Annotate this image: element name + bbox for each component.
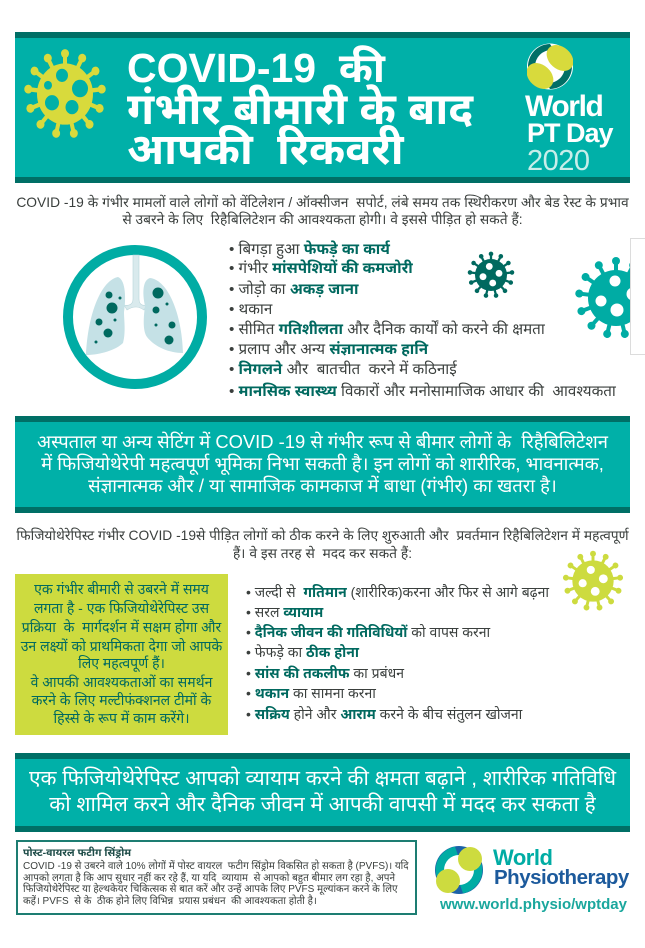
symptom list: • थकान <box>229 301 272 318</box>
post-viral fatigue box: आपको लगता है कि आप सुधार नहीं कर रहे हैं, या यदि व्यायाम से आपको बहुत बीमार लग रहा है, अपने <box>23 873 395 884</box>
help list: • फेफड़े का ठीक होना <box>246 644 359 660</box>
callout: hospital rehabilitation: संज्ञानात्मक और / या सामाजिक कामकाज में बाधा (गंभीर) का खतरा है। <box>88 475 557 496</box>
physiotherapist intro text: हैं। वे इस तरह से मदद कर सकते हैं: <box>233 546 412 561</box>
post-viral fatigue box: पोस्ट-वायरल फटीग सिंड्रोम <box>23 847 131 859</box>
post-viral fatigue box <box>16 840 417 915</box>
logo: World PT Day 2020: PT Day <box>527 118 613 148</box>
logo: World Physiotherapy: World <box>493 845 552 870</box>
logo: World PT Day 2020: World <box>525 90 602 123</box>
symptom list: • मानसिक स्वास्थ्य विकारों और मनोसामाजिक आधार की आवश्यकता <box>229 383 616 400</box>
symptom list: • प्रलाप और अन्य संज्ञानात्मक हानि <box>229 341 428 358</box>
help list <box>246 584 550 723</box>
yellow box: एक गंभीर बीमारी से उबरने में समय <box>34 581 209 597</box>
symptom list: • निगलने और बातचीत करने में कठिनाई <box>229 361 457 378</box>
help list: • थकान का सामना करना <box>246 685 376 701</box>
title: COVID-19 की <box>127 45 385 91</box>
intro text: COVID -19 के गंभीर मामलों वाले लोगों को वेंटिलेशन / ऑक्सीजन सपोर्ट, लंबे समय तक स्थिरीकरण और बेड रेस्ट के प्रभाव <box>16 195 629 210</box>
yellow box: लिए महत्वपूर्ण हैं। <box>78 655 165 671</box>
logo mark <box>527 44 573 90</box>
logo: World PT Day 2020: 2020 <box>527 145 590 177</box>
icon: yellow virus <box>24 49 106 138</box>
header panel <box>15 32 630 183</box>
callout: physiotherapist helps <box>15 753 630 832</box>
physiotherapist intro text <box>16 528 629 561</box>
icon: teal virus cropped <box>575 257 630 338</box>
title: गंभीर बीमारी के बाद <box>127 85 473 134</box>
callout: hospital rehabilitation: अस्पताल या अन्य सेटिंग में COVID -19 से गंभीर रूप से बीमार लोगों के रिहैबिलिटेशन <box>37 431 608 452</box>
icon: dark virus <box>468 252 514 298</box>
yellow box: लगता है - एक फिजियोथेरेपिस्ट उस <box>34 600 209 616</box>
symptom list <box>229 240 616 400</box>
post-viral fatigue box: फिजियोथेरेपिस्ट या हेल्थकेयर चिकित्सक से बात करें और उन्हें आपके लिए PVFS मूल्यांकन करने के लिए <box>23 884 398 895</box>
title <box>127 45 474 174</box>
physiotherapist intro text: फिजियोथेरेपिस्ट गंभीर COVID -19से पीड़ित लोगों को ठीक करने के लिए शुरुआती और प्रवर्तमान रिहैबिलिटेशन में महत्वपूर्ण <box>16 528 629 543</box>
white frame covering the virus edge <box>630 238 645 355</box>
help list: • सांस की तकलीफ का प्रबंधन <box>246 665 404 681</box>
yellow box: उन लक्ष्यों को प्राथमिकता देगा जो आपके <box>21 638 222 654</box>
yellow box <box>15 574 228 735</box>
callout: physiotherapist helps: एक फिजियोथेरेपिस्ट आपको व्यायाम करने की क्षमता बढ़ाने , शारीरिक गतिविधि <box>29 767 616 790</box>
logo: World Physiotherapy <box>435 845 630 913</box>
symptom list: • जोड़ो का अकड़ जाना <box>229 281 358 298</box>
yellow box: प्रक्रिया के मार्गदर्शन में सक्षम होगा और <box>22 619 221 635</box>
icon: lime virus <box>562 550 623 610</box>
symptom list: • गंभीर मांसपेशियों की कमजोरी <box>229 260 413 277</box>
callout: physiotherapist helps: को शामिल करने और दैनिक जीवन में आपकी वापसी में मदद कर सकता है <box>49 793 596 816</box>
symptom list: • बिगड़ा हुआ फेफड़े का कार्य <box>229 241 390 258</box>
intro text <box>16 194 629 227</box>
logo: World Physiotherapy: Physiotherapy <box>494 866 629 889</box>
callout: hospital rehabilitation <box>15 416 630 513</box>
help list: • दैनिक जीवन की गतिविधियों को वापस करना <box>246 624 490 640</box>
title: आपकी रिकवरी <box>127 126 404 174</box>
intro text: से उबरने के लिए रिहैबिलिटेशन की आवश्यकता होगी। वे इससे पीड़ित हो सकते हैं: <box>122 212 523 227</box>
yellow box: करने के लिए मल्टीफंक्शनल टीमों के <box>32 692 211 708</box>
logo: World PT Day 2020 <box>525 44 614 177</box>
logo mark <box>435 846 483 894</box>
help list: • सक्रिय होने और आराम करने के बीच संतुलन खोजना <box>246 706 522 722</box>
icon: lungs in circle <box>63 245 207 389</box>
yellow box: वे आपकी आवश्यकताओं का समर्थन <box>31 674 212 690</box>
yellow box: हिस्से के रूप में काम करेंगे। <box>54 710 189 726</box>
callout: hospital rehabilitation: में फिजियोथेरेपी महत्वपूर्ण भूमिका निभा सकती है। इन लोगों को शारीरिक, भावनात्मक, <box>41 453 604 474</box>
logo: World Physiotherapy: www.world.physio/wptday <box>440 896 627 913</box>
symptom list: • सीमित गतिशीलता और दैनिक कार्यों को करने की क्षमता <box>229 321 545 338</box>
help list: • सरल व्यायाम <box>246 604 323 620</box>
post-viral fatigue box: कहें। PVFS से के ठीक होने लिए विभिन्न प्रयास प्रबंधन की आवश्यकता होती है। <box>23 896 317 907</box>
help list: • जल्दी से गतिमान (शारीरिक)करना और फिर से आगे बढ़ना <box>246 584 549 600</box>
post-viral fatigue box: COVID -19 से उबरने वाले 10% लोगों में पोस्ट वायरल फटीग सिंड्रोम विकसित हो सकता है (PVFS)। यदि <box>23 861 409 872</box>
